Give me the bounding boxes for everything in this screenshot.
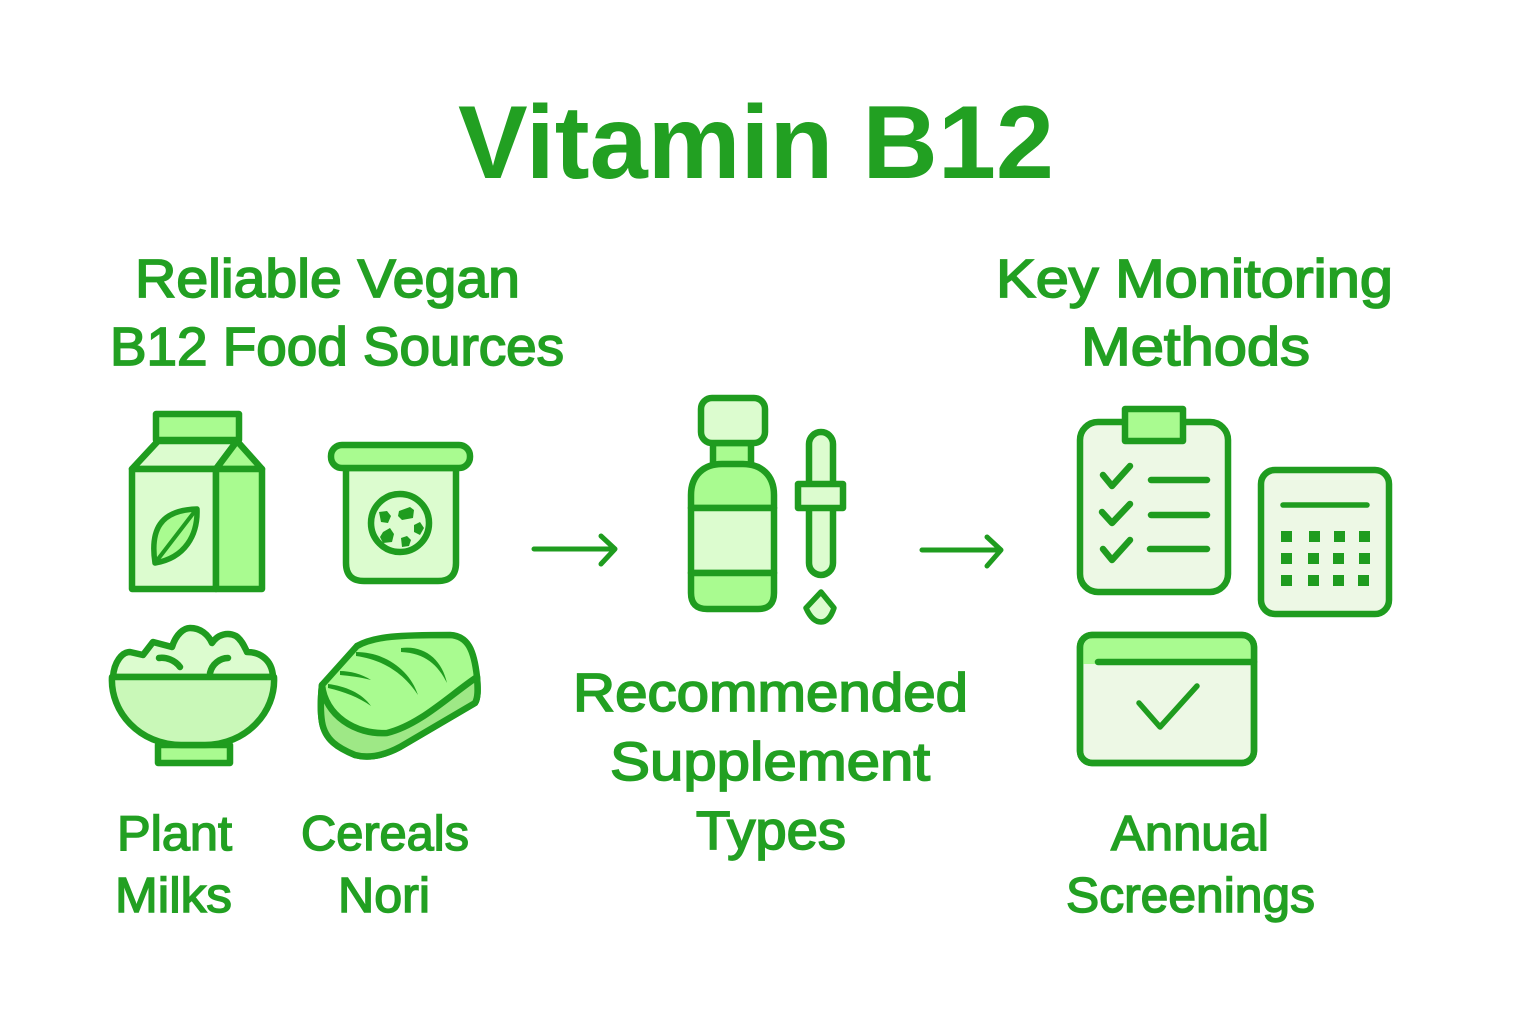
- icon: salad bowl: [112, 628, 274, 763]
- heading: key monitoring methods: Methods: [1081, 317, 1310, 377]
- heading: key monitoring methods: Key Monitoring: [996, 249, 1393, 309]
- label: plant milks: [115, 807, 232, 923]
- heading: reliable vegan B12 food sources: Reliable Vegan: [135, 249, 520, 309]
- icon: nori sheet: [321, 635, 478, 757]
- icon: plant milk carton: [132, 414, 262, 589]
- arrow: food sources to supplements: [534, 536, 615, 564]
- label: annual screenings: Annual: [1111, 807, 1269, 861]
- label: annual screenings: Screenings: [1066, 869, 1315, 923]
- label: cereals nori: Cereals: [301, 807, 469, 861]
- heading: reliable vegan B12 food sources: B12 Food Sources: [110, 317, 564, 377]
- icon: calendar: [1261, 470, 1389, 614]
- arrow: supplements to monitoring: [922, 537, 1001, 566]
- label: annual screenings: [1066, 807, 1315, 923]
- icon: dropper: [798, 432, 843, 622]
- icon: fortified cereal cup: [331, 445, 470, 581]
- icon: supplement bottle: [691, 398, 774, 609]
- label: cereals nori: [301, 807, 469, 923]
- heading: reliable vegan B12 food sources: [110, 249, 564, 377]
- label: plant milks: Plant: [117, 807, 232, 861]
- title: Vitamin B12: [458, 85, 1054, 201]
- icon: clipboard checklist: [1080, 409, 1228, 592]
- heading: key monitoring methods: [996, 249, 1393, 377]
- heading: recommended supplement types: [573, 663, 968, 861]
- heading: recommended supplement types: Types: [696, 801, 846, 861]
- icon: annual screening window: [1080, 635, 1254, 763]
- heading: recommended supplement types: Recommended: [573, 663, 968, 723]
- heading: recommended supplement types: Supplement: [610, 732, 930, 792]
- label: cereals nori: Nori: [338, 869, 430, 923]
- label: plant milks: Milks: [115, 869, 232, 923]
